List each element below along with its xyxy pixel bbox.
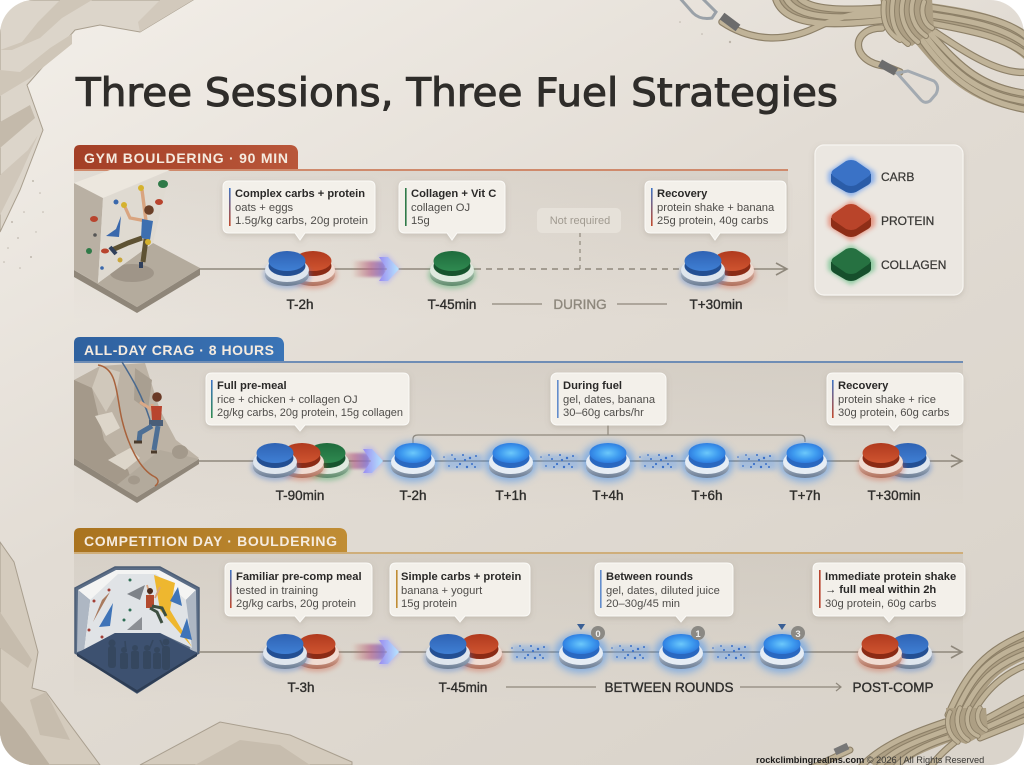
callout: immediate protein: Immediate protein shake: [825, 571, 956, 583]
time labels: gym: T-45min: [428, 297, 476, 312]
callout: immediate protein: 30g protein, 60g carbs: [825, 598, 937, 610]
time labels: competition: BETWEEN ROUNDS: [604, 680, 734, 695]
callout: familiar meal: 2g/kg carbs, 20g protein: [236, 598, 356, 610]
callout: recovery: Recovery: [838, 380, 889, 392]
callout: simple carbs: Simple carbs + protein: [401, 571, 521, 583]
callout: between rounds: Between rounds: [606, 571, 693, 583]
time labels: competition: T-45min: [439, 680, 487, 695]
callout: recovery: protein shake + banana: [657, 202, 775, 214]
time labels: crag: T-2h: [399, 488, 427, 503]
time labels: crag: [276, 488, 920, 503]
illustration: bouldering wall: [74, 170, 200, 313]
illustration: crag climber: [74, 362, 199, 503]
legend item: carb: [828, 157, 914, 197]
time labels: crag: T+30min: [868, 488, 920, 503]
panel: gym bouldering: [74, 145, 788, 320]
time labels: gym: DURING: [553, 297, 607, 312]
fuel node: round 1: 1: [695, 629, 701, 640]
fuel node: T-90min full meal: [251, 443, 351, 481]
callout: recovery: protein shake + rice: [838, 394, 936, 406]
legend item: collagen: COLLAGEN: [881, 258, 946, 272]
time labels: competition: [287, 680, 934, 695]
callout: recovery: [827, 373, 963, 431]
callout: during fuel: During fuel: [563, 380, 622, 392]
time labels: gym: [286, 297, 742, 312]
heading tab: competition day: [74, 528, 347, 553]
fuel node: T+6h: [639, 442, 734, 482]
callout: complex carbs: [223, 181, 375, 240]
fuel node: T+30min recovery: [857, 443, 932, 481]
fuel node: T-2h carb and protein: [263, 251, 337, 289]
rock decoration: bottom left: [0, 542, 100, 765]
arrow: gym flow: [352, 255, 400, 283]
legend: [815, 145, 963, 295]
callout: collagen: collagen OJ: [411, 202, 470, 214]
callout: familiar meal: [225, 563, 372, 622]
callout: simple carbs: 15g protein: [401, 598, 457, 610]
callout: not required: Not required: [550, 215, 610, 227]
fuel node: post-comp: [856, 634, 934, 672]
fuel node: round 0: 0: [595, 629, 601, 640]
arrow: crag flow: [336, 447, 384, 475]
callout: not required: [537, 208, 621, 233]
legend item: collagen: [828, 245, 946, 285]
fuel node: round 1: [611, 626, 708, 673]
callout: full pre-meal: Full pre-meal: [217, 380, 287, 392]
callout: complex carbs: Complex carbs + protein: [235, 188, 365, 200]
chalk speckles: [3, 21, 731, 269]
fuel node: round 3: 3: [795, 629, 801, 640]
callout: recovery: 30g protein, 60g carbs: [838, 407, 950, 419]
callout: recovery: [645, 181, 786, 240]
callout: between rounds: gel, dates, diluted juice: [606, 585, 720, 597]
fuel node: T+1h: [443, 442, 538, 482]
heading tab: all-day crag: ALL-DAY CRAG · 8 HOURS: [84, 342, 274, 358]
rock decoration: top left: [0, 0, 193, 232]
heading tab: gym bouldering: GYM BOULDERING · 90 MIN: [84, 150, 288, 166]
timeline: gym: [200, 268, 475, 270]
time labels: gym: T+30min: [690, 297, 742, 312]
legend item: protein: PROTEIN: [881, 214, 934, 228]
rope: bottom right: [812, 632, 1024, 765]
fuel node: T+30min recovery: [679, 251, 756, 289]
callout: recovery: 25g protein, 40g carbs: [657, 215, 769, 227]
callout: full pre-meal: 2g/kg carbs, 20g protein, 15g collagen: [217, 407, 403, 419]
time labels: crag: T+7h: [789, 488, 821, 503]
fuel node: round 3: [712, 624, 809, 673]
legend item: protein: [828, 201, 934, 241]
panel: all-day crag: [74, 337, 963, 512]
fuel node: T-45min: [424, 634, 504, 672]
rope and carabiners: top right: [678, 0, 1024, 110]
time labels: competition: POST-COMP: [852, 680, 934, 695]
callout: during fuel: gel, dates, banana: [563, 394, 656, 406]
bracket: during fuel: [413, 425, 805, 443]
callout: between rounds: 20–30g/45 min: [606, 598, 680, 610]
time labels: crag: T+6h: [691, 488, 723, 503]
callout: collagen: Collagen + Vit C: [411, 188, 496, 200]
callout: recovery: Recovery: [657, 188, 708, 200]
time labels: crag: T-90min: [276, 488, 324, 503]
panel: competition day: [74, 528, 965, 703]
callout: collagen: 15g: [411, 215, 430, 227]
callout: between rounds: [595, 563, 733, 622]
callout: immediate protein: [813, 563, 965, 622]
callout: collagen: [399, 181, 505, 240]
callout: complex carbs: 1.5g/kg carbs, 20g protein: [235, 215, 368, 227]
heading tab: gym bouldering: [74, 145, 298, 170]
time labels: crag: T+4h: [592, 488, 624, 503]
callout: complex carbs: oats + eggs: [235, 202, 294, 214]
callout: familiar meal: Familiar pre-comp meal: [236, 571, 362, 583]
callout: simple carbs: banana + yogurt: [401, 585, 483, 597]
illustration: competition wall: [75, 567, 199, 693]
callout: simple carbs: [390, 563, 530, 622]
rock decoration: bottom centre: [140, 722, 352, 765]
timeline: crag: [199, 455, 962, 467]
callout: during fuel: [551, 373, 666, 425]
callout: immediate protein: → full meal within 2h: [825, 584, 936, 596]
time labels: crag: T+1h: [495, 488, 527, 503]
fuel node: T-3h: [261, 634, 341, 672]
legend item: carb: CARB: [881, 170, 914, 184]
callout: familiar meal: tested in training: [236, 585, 318, 597]
callout: full pre-meal: [206, 373, 409, 431]
callout: full pre-meal: rice + chicken + collagen OJ: [217, 394, 358, 406]
fuel node: T+4h: [540, 442, 635, 482]
arrow: competition flow: [352, 638, 400, 666]
fuel node: T-2h: [386, 442, 440, 482]
time labels: competition: T-3h: [287, 680, 315, 695]
footer credit: rockclimbingrealms.com © 2026 | All Rights Reserved: [756, 755, 984, 765]
fuel node: round 0: [511, 624, 608, 673]
title: Three Sessions, Three Fuel Strategies: [75, 71, 838, 116]
callout: during fuel: 30–60g carbs/hr: [563, 407, 644, 419]
time labels: gym: T-2h: [286, 297, 314, 312]
timeline: competition: [199, 646, 962, 658]
fuel node: T-45min collagen: [428, 251, 476, 289]
fuel node: T+7h: [737, 442, 832, 482]
heading tab: all-day crag: [74, 337, 284, 362]
heading tab: competition day: COMPETITION DAY · BOULDERING: [84, 533, 337, 549]
